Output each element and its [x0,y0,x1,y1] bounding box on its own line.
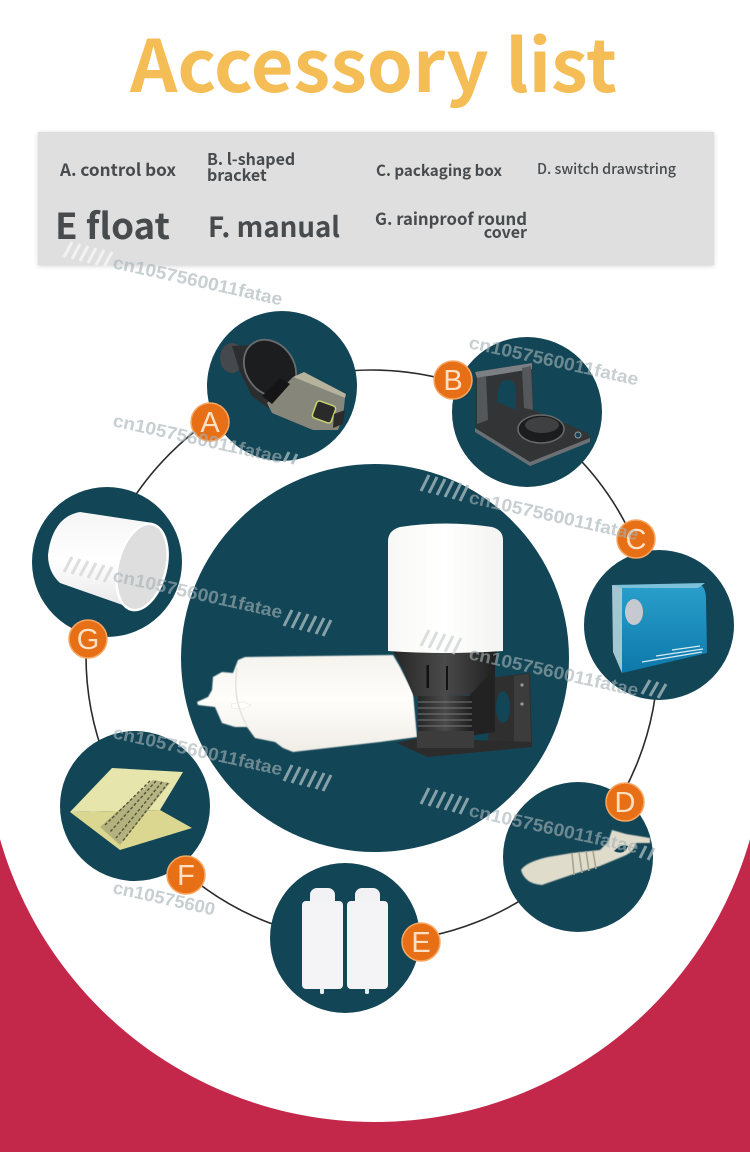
badge D [606,783,644,821]
satellite E: floats [270,863,420,1013]
panel: accessory names [38,132,714,265]
main product circle [181,464,569,852]
label G [375,206,527,243]
product: floats [197,655,417,752]
product: white cap [388,524,503,653]
watermarks: cn1057560011fatae [111,252,284,309]
watermarks: cn10575600 [111,877,217,919]
watermarks: cn1057560011fatae [111,410,284,467]
watermarks: cn1057560011fatae [467,332,640,389]
badge G: G [77,624,99,656]
watermarks: cn1057560011fatae [467,487,640,544]
label E: E float [55,198,170,250]
label D: D. switch drawstring [537,158,677,179]
label B: B. l-shaped [207,146,295,170]
watermarks: cn1057560011fatae [467,643,640,700]
satellite B: L-shaped bracket [452,337,602,487]
label B: bracket [207,162,267,186]
right float [347,888,388,994]
product: bracket [397,673,532,757]
satellite G: rainproof cover [32,487,182,637]
left float [302,888,343,994]
satellite C: packaging box [584,550,734,700]
badge F: F [177,860,195,892]
badge B [434,361,472,399]
badge E: E [411,927,431,959]
watermarks [64,242,666,919]
label C: C. packaging box [376,159,502,181]
badge B: B [443,365,463,397]
satellite F: manual [60,731,210,881]
badge A: A [200,407,220,439]
title: Accessory list [129,8,617,113]
watermarks: cn1057560011fatae [467,800,640,857]
badge A [191,403,229,441]
label G: cover [484,219,527,243]
connector ring [86,370,658,942]
watermarks: cn1057560011fatae [111,722,284,779]
watermarks: cn1057560011fatae [111,565,284,622]
badge C: C [626,524,646,556]
badge D: D [615,787,635,819]
satellite D: drawstring [503,782,653,932]
badge G [69,620,107,658]
badge C [617,520,655,558]
label G: G. rainproof round [375,206,527,230]
label A: A. control box [59,156,176,181]
badge E [402,923,440,961]
product: threaded collar [393,651,497,748]
badge F [167,856,205,894]
label F: F. manual [208,206,340,246]
satellite A: control box [207,311,357,461]
